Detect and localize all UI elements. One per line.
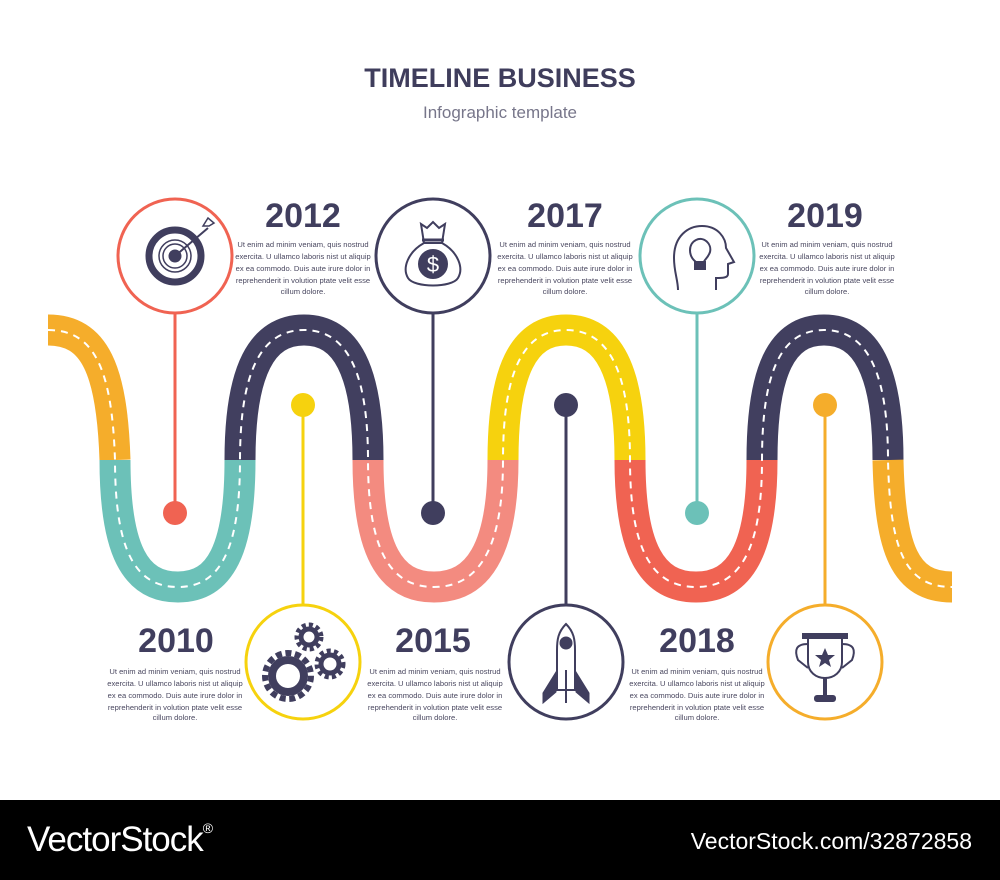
year 2010 block: Ut enim ad minim veniam, quis nostrud [109,667,241,676]
year 2010 block: 2010 [138,622,214,660]
year 2017 block: Ut enim ad minim veniam, quis nostrud [499,240,631,249]
year 2017 block: cillum dolore. [543,287,587,296]
year 2012 block: reprehenderit in volution ptate velit esse [236,276,370,285]
icon: head with bulb [674,226,734,290]
milestone 2019 [640,199,754,525]
year 2012 block: exercita. U ullamco laboris nist ut aliquip [235,252,371,261]
subtitle: Infographic template [423,103,577,122]
year 2018 block: cillum dolore. [675,713,719,722]
year 2012 block: 2012 [265,197,341,235]
year 2015 block: cillum dolore. [413,713,457,722]
year 2018 block: exercita. U ullamco laboris nist ut aliquip [629,679,765,688]
title: TIMELINE BUSINESS [364,63,636,93]
milestone 2018 [768,393,882,719]
year 2019 block: 2019 [787,197,863,235]
year 2017 block: reprehenderit in volution ptate velit esse [498,276,632,285]
year 2010 block [107,622,243,722]
year 2015 block: 2015 [395,622,471,660]
year 2012 block: cillum dolore. [281,287,325,296]
year 2019 block: Ut enim ad minim veniam, quis nostrud [761,240,893,249]
year 2015 block [367,622,503,722]
year 2017 block: 2017 [527,197,603,235]
year 2012 block: Ut enim ad minim veniam, quis nostrud [237,240,369,249]
milestone 2015 [509,393,623,719]
icon: money bag [406,222,460,286]
year 2010 block: ex ea commodo. Duis aute irure dolor in [108,691,242,700]
year 2012 block [235,197,371,296]
milestone 2010 [246,393,360,719]
year 2010 block: reprehenderit in volution ptate velit esse [108,703,242,712]
year 2019 block: exercita. U ullamco laboris nist ut aliquip [759,252,895,261]
year 2010 block: exercita. U ullamco laboris nist ut aliquip [107,679,243,688]
year 2017 block: exercita. U ullamco laboris nist ut aliquip [497,252,633,261]
year 2015 block: reprehenderit in volution ptate velit esse [368,703,502,712]
road [48,330,952,587]
year 2018 block: ex ea commodo. Duis aute irure dolor in [630,691,764,700]
year 2018 block: Ut enim ad minim veniam, quis nostrud [631,667,763,676]
year 2019 block: ex ea commodo. Duis aute irure dolor in [760,264,894,273]
year 2019 block [759,197,895,296]
icon: money bag: $ [427,252,439,277]
year 2018 block [629,622,765,722]
footer url: VectorStock.com/32872858 [691,828,972,854]
year 2015 block: Ut enim ad minim veniam, quis nostrud [369,667,501,676]
year 2015 block: exercita. U ullamco laboris nist ut aliquip [367,679,503,688]
icon: trophy [796,634,854,701]
year 2019 block: cillum dolore. [805,287,849,296]
icon: gears [265,625,343,699]
year 2019 block: reprehenderit in volution ptate velit esse [760,276,894,285]
year 2010 block: cillum dolore. [153,713,197,722]
year 2015 block: ex ea commodo. Duis aute irure dolor in [368,691,502,700]
icon: rocket [543,624,589,703]
year 2018 block: reprehenderit in volution ptate velit esse [630,703,764,712]
year 2017 block [497,197,633,296]
year 2012 block: ex ea commodo. Duis aute irure dolor in [236,264,370,273]
footer brand: VectorStock® [27,820,212,859]
footer bar [0,800,1000,880]
year 2018 block: 2018 [659,622,735,660]
icon: target [149,218,214,282]
year 2017 block: ex ea commodo. Duis aute irure dolor in [498,264,632,273]
milestone 2017 [376,199,490,525]
milestone 2012 [118,199,232,525]
